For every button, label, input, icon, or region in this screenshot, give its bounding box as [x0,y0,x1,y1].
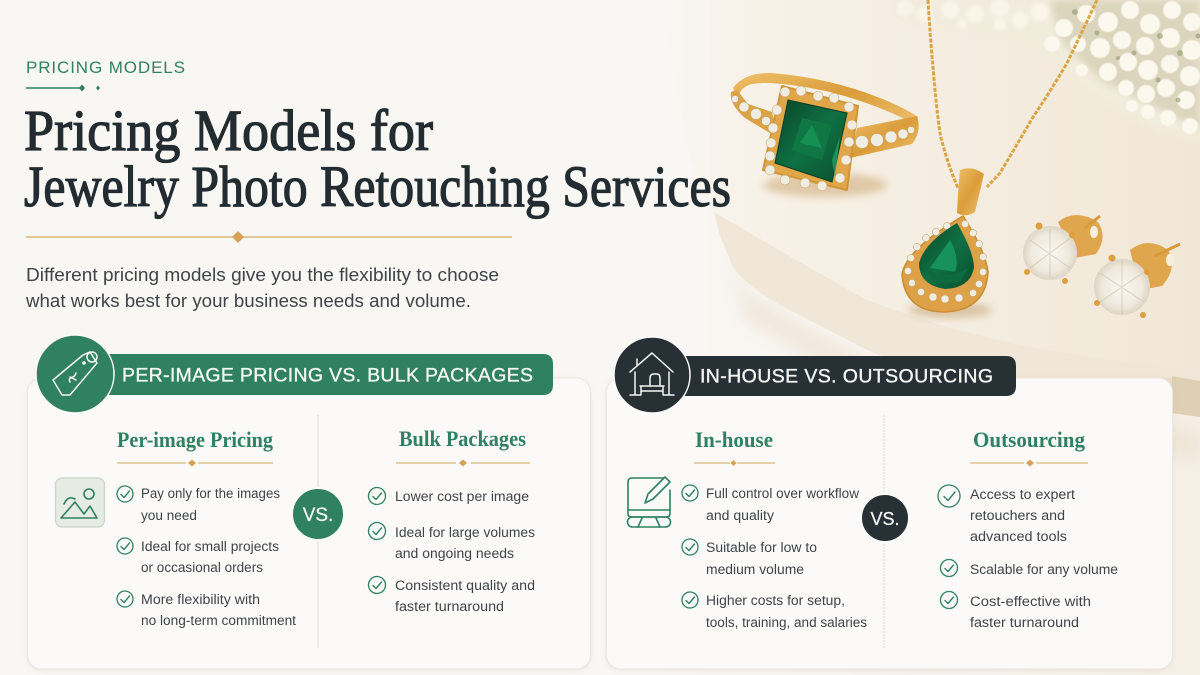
vs badge: VS. [870,509,900,529]
list: and ongoing needs [395,546,514,561]
icon: house with desk [614,337,690,413]
necklace chain [928,0,1097,188]
list: Scalable for any volume [970,562,1118,577]
list: Lower cost per image [395,489,529,504]
marble slab [660,0,1200,460]
list: or occasional orders [141,560,263,575]
list: More flexibility with [141,592,260,607]
title [24,98,731,219]
banner [90,354,553,395]
column: outsourcing [938,427,1118,630]
column: in-house [628,427,867,630]
column: outsourcing: Outsourcing [973,427,1085,452]
photo: jewelry on marble slab [660,0,1200,460]
column: per-image pricing [56,427,296,628]
eyebrow: pricing models [26,58,185,92]
list: you need [141,508,197,523]
intro text: Different pricing models give you the flexibility to choose [26,265,499,285]
panel: in-house vs outsourcing [606,337,1172,669]
ring [731,73,919,197]
list: Ideal for large volumes [395,525,535,540]
title: Pricing Models for [24,98,433,163]
list [938,485,1118,630]
list: Access to expert [970,487,1075,502]
list: medium volume [706,562,804,577]
list [117,486,296,628]
vs badge [861,415,909,648]
icon: image [56,478,104,527]
column: in-house: In-house [695,427,773,452]
list: advanced tools [970,529,1067,544]
earrings [1023,215,1180,318]
list: tools, training, and salaries [706,615,867,630]
banner: IN-HOUSE VS. OUTSOURCING [700,366,993,388]
list: faster turnaround [395,599,504,614]
list [368,488,535,614]
vs badge [292,415,344,648]
list: Consistent quality and [395,578,535,593]
list: Full control over workflow [706,486,859,501]
baby's breath flowers [890,0,1200,140]
list: and quality [706,508,774,523]
list: no long-term commitment [141,613,296,628]
banner: PER-IMAGE PRICING VS. BULK PACKAGES [122,364,533,386]
list: Suitable for low to [706,540,817,555]
column: bulk packages: Bulk Packages [399,426,526,451]
icon: tablet with pencil [628,477,670,527]
list: Higher costs for setup, [706,593,845,608]
column: bulk packages [368,426,535,614]
pendant [902,168,992,318]
gold divider [26,231,512,243]
card background [28,378,590,669]
panel: per-image vs bulk [28,335,590,669]
list: Ideal for small projects [141,539,279,554]
banner [665,356,1016,396]
icon: price tag [36,335,114,413]
list [682,485,867,630]
intro text [25,265,499,311]
list: Pay only for the images [141,486,280,501]
intro text: what works best for your business needs and volume. [25,291,471,311]
list: faster turnaround [970,615,1079,630]
eyebrow: pricing models: PRICING MODELS [26,58,185,77]
vs badge: VS. [303,505,333,526]
list: Cost-effective with [970,594,1091,609]
title: Jewelry Photo Retouching Services [24,154,731,219]
column: per-image pricing: Per-image Pricing [117,427,273,452]
card background [606,378,1172,669]
list: retouchers and [970,508,1065,523]
